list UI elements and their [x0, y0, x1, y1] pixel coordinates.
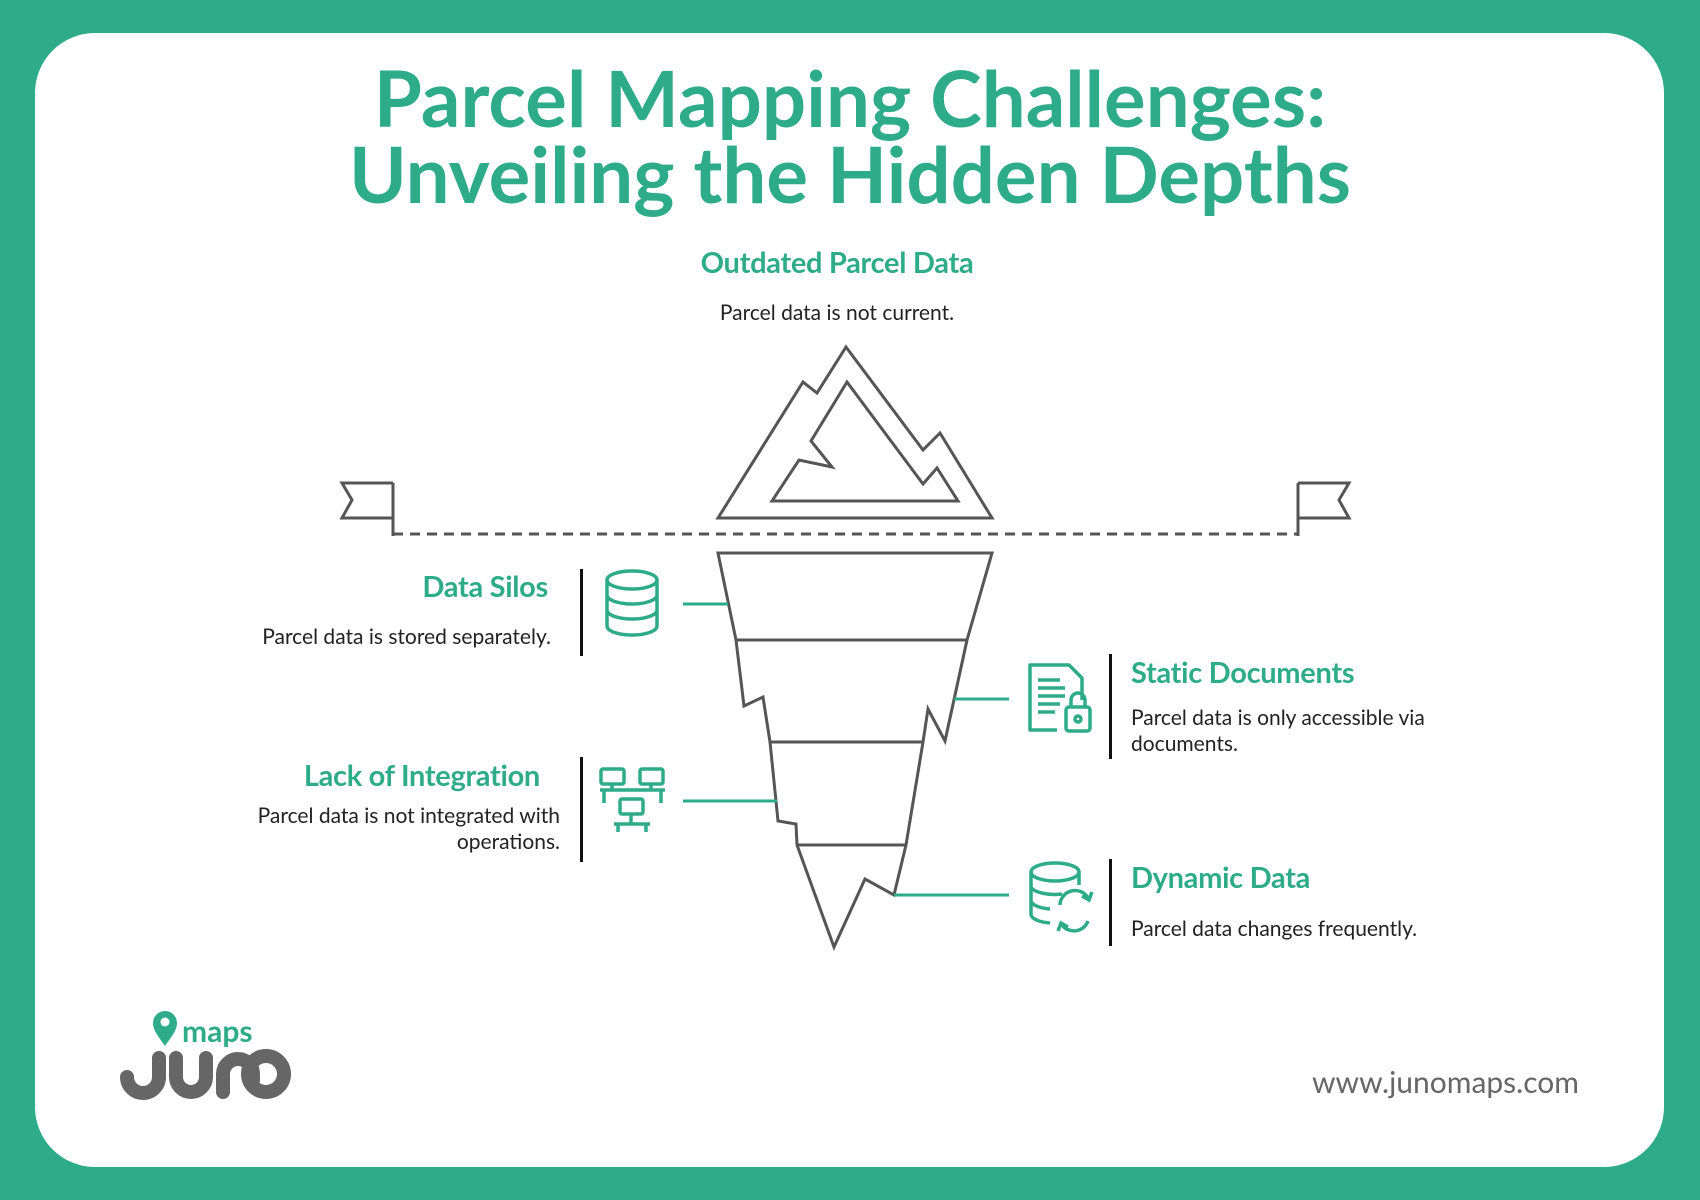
block: lack of integration: Parcel data is not integrated with — [258, 803, 560, 828]
bar integration — [580, 757, 583, 862]
icon: database — [607, 571, 657, 635]
logo: maps — [182, 1013, 253, 1049]
text: outdated: Parcel data is not current. — [720, 300, 954, 325]
icon: document lock — [1030, 665, 1090, 731]
block: lack of integration: operations. — [457, 829, 560, 854]
icon: database sync — [1031, 863, 1092, 931]
heading: outdated: Outdated Parcel Data — [701, 245, 973, 280]
block: lack of integration: Lack of Integration — [304, 758, 540, 793]
title: Unveiling the Hidden Depths — [349, 126, 1351, 220]
bar dynamic — [1109, 859, 1112, 946]
block: dynamic data: Parcel data changes frequently. — [1131, 916, 1417, 941]
block: dynamic data: Dynamic Data — [1131, 860, 1310, 895]
block: static documents: Parcel data is only accessible via — [1131, 705, 1425, 730]
block: static documents: documents. — [1131, 731, 1238, 756]
bar silos — [580, 569, 583, 656]
block: dynamic data — [1131, 860, 1417, 941]
title — [349, 50, 1351, 220]
icon: network computers — [600, 769, 665, 832]
title: Parcel Mapping Challenges: — [374, 50, 1326, 144]
block: static documents — [1131, 655, 1425, 756]
footer url: www.junomaps.com — [1312, 1064, 1579, 1100]
iceberg underwater — [718, 553, 992, 947]
connectors — [683, 604, 1009, 895]
logo — [127, 1011, 284, 1093]
block: data silos: Parcel data is stored separately. — [262, 624, 551, 649]
bar static — [1109, 654, 1112, 759]
flags and waterline — [342, 483, 1349, 536]
iceberg top — [718, 347, 992, 518]
block: data silos — [262, 569, 551, 649]
block: data silos: Data Silos — [422, 569, 548, 604]
block: static documents: Static Documents — [1131, 655, 1354, 690]
block: lack of integration — [258, 758, 560, 854]
